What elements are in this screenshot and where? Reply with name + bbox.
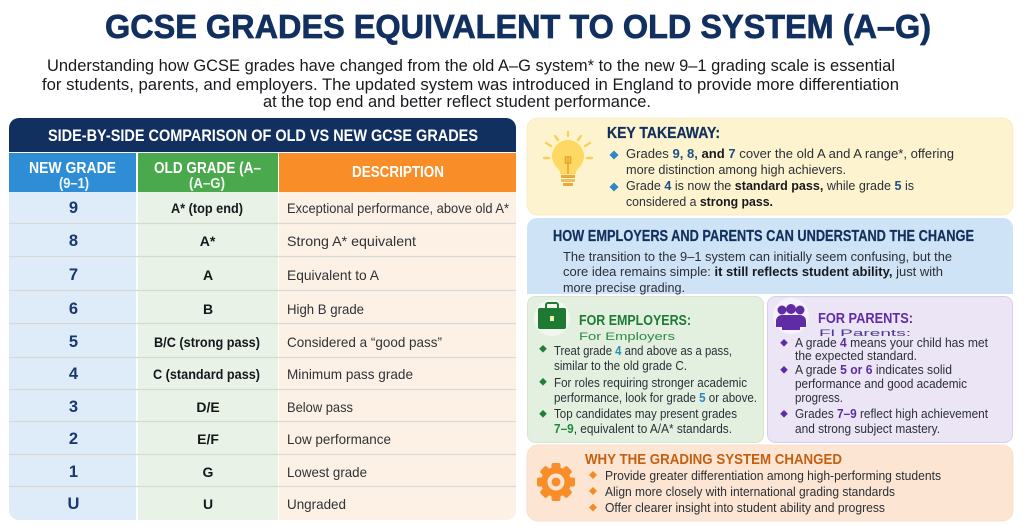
bullet list: employers: For roles requiring stronger academic bbox=[554, 375, 747, 390]
bullet list: parents: and strong subject mastery. bbox=[795, 421, 940, 436]
row 2: 2 bbox=[69, 430, 78, 448]
row U: U bbox=[203, 496, 213, 512]
column body: old grade bbox=[138, 192, 278, 520]
bullet list: key takeaway: considered a strong pass. bbox=[626, 194, 773, 209]
row 2: Low performance bbox=[287, 431, 391, 447]
row U: U bbox=[68, 495, 79, 513]
bullet list: key takeaway: more distinction among high achievers. bbox=[626, 162, 846, 177]
row 4 bbox=[69, 365, 413, 383]
title: GCSE GRADES EQUIVALENT TO OLD SYSTEM (A–G) bbox=[105, 8, 931, 45]
header text: old grade bbox=[154, 160, 261, 192]
row 9: 9 bbox=[69, 199, 78, 217]
bullet list: parents bbox=[780, 335, 988, 436]
row U bbox=[68, 495, 346, 513]
row 1: Lowest grade bbox=[287, 464, 367, 480]
bullet list: employers: 7–9, equivalent to A/A* standards. bbox=[554, 421, 732, 436]
row 2: E/F bbox=[197, 431, 219, 447]
panel: for employers bbox=[528, 296, 764, 442]
column header: old grade bbox=[138, 153, 278, 192]
icon: briefcase bbox=[534, 300, 570, 336]
bullet list: parents: performance and good academic bbox=[795, 376, 967, 391]
row 9: Exceptional performance, above old A* bbox=[287, 200, 510, 216]
header text: new grade bbox=[29, 160, 116, 192]
body text: understand the change: The transition to the 9–1 system can initially seem confusing, but the bbox=[563, 249, 952, 264]
bullet list: key takeaway: Grade 4 is now the standard pass, while grade 5 is bbox=[626, 178, 914, 193]
panel: key takeaway bbox=[527, 118, 1013, 215]
column body: description bbox=[279, 192, 516, 520]
row 7: 7 bbox=[69, 266, 78, 284]
row 3: 3 bbox=[69, 398, 78, 416]
subheading: for employers: For Employers bbox=[579, 331, 676, 343]
bullet list: employers: performance, look for grade 5 or above. bbox=[554, 390, 757, 405]
row 7: Equivalent to A bbox=[287, 267, 380, 283]
row 6: 6 bbox=[69, 300, 78, 318]
icon: light bulb bbox=[544, 132, 592, 186]
intro text bbox=[42, 57, 899, 111]
row 5: Considered a “good pass” bbox=[287, 334, 442, 350]
bullet list: key takeaway: Grades 9, 8, and 7 cover the old A and A range*, offering bbox=[626, 146, 954, 161]
row U: Ungraded bbox=[287, 496, 346, 512]
bullet list: employers: Top candidates may present grades bbox=[554, 406, 737, 421]
panel: for parents bbox=[768, 296, 1012, 442]
bullet list: key takeaway bbox=[610, 146, 954, 209]
row 8: A* bbox=[200, 233, 216, 249]
bullet list: reasons: Align more closely with international grading standards bbox=[605, 484, 895, 499]
subheading: for parents: Fl Parents: bbox=[819, 328, 911, 338]
panel: comparison table bbox=[9, 118, 516, 520]
bullet list: reasons: Provide greater differentiation among high-performing students bbox=[605, 468, 941, 483]
row 2 bbox=[69, 430, 391, 448]
row 5: B/C (strong pass) bbox=[154, 334, 260, 350]
heading: why the system changed: WHY THE GRADING SYSTEM CHANGED bbox=[585, 451, 842, 468]
row 8: Strong A* equivalent bbox=[287, 233, 416, 249]
bullet list: parents: A grade 5 or 6 indicates solid bbox=[795, 362, 952, 377]
bullet list: parents: the expected standard. bbox=[795, 348, 917, 363]
row 1: G bbox=[203, 464, 214, 480]
icon: people group bbox=[773, 298, 809, 334]
row 7 bbox=[69, 266, 380, 284]
row 4: Minimum pass grade bbox=[287, 366, 413, 382]
bullet list: employers: Treat grade 4 and above as a pass, bbox=[554, 343, 732, 358]
table title bar bbox=[9, 118, 516, 152]
row 3 bbox=[69, 398, 353, 416]
icon: gear bbox=[537, 463, 575, 501]
row 6: High B grade bbox=[287, 301, 364, 317]
heading: for employers: FOR EMPLOYERS: bbox=[579, 313, 691, 329]
panel: why the grading system changed bbox=[527, 445, 1013, 521]
row 8 bbox=[69, 232, 416, 250]
panel: how employers and parents can understand the change bbox=[527, 218, 1013, 295]
intro text: at the top end and better reflect student performance. bbox=[263, 93, 651, 111]
bullet list: employers bbox=[539, 343, 757, 436]
body text: understand the change: core idea remains simple: it still reflects student ability, just with bbox=[563, 264, 943, 279]
bullet list: employers: similar to the old grade C. bbox=[554, 358, 687, 373]
body text: understand the change: more precise grading. bbox=[563, 280, 685, 295]
intro text: Understanding how GCSE grades have changed from the old A–G system* to the new 9–1 grading scale is essential bbox=[47, 57, 895, 75]
row 5: 5 bbox=[69, 333, 78, 351]
row 7: A bbox=[203, 267, 213, 283]
header text: new grade: (9–1) bbox=[59, 175, 89, 192]
heading: key takeaway: KEY TAKEAWAY: bbox=[607, 125, 720, 142]
row 6 bbox=[69, 300, 364, 318]
intro text: for students, parents, and employers. The updated system was introduced in England to provide more differentiation bbox=[42, 76, 899, 94]
row 8: 8 bbox=[69, 232, 78, 250]
header text: old grade: (A–G) bbox=[189, 175, 225, 192]
bullet list: parents: A grade 4 means your child has met bbox=[795, 335, 988, 350]
row 3: Below pass bbox=[287, 399, 353, 415]
bullet list: reasons bbox=[589, 468, 941, 515]
row 3: D/E bbox=[196, 399, 220, 415]
row 4: C (standard pass) bbox=[153, 366, 260, 382]
column body: new grade bbox=[9, 192, 136, 520]
row 6: B bbox=[203, 301, 213, 317]
bullet list: parents: progress. bbox=[795, 390, 843, 405]
row 1 bbox=[69, 463, 367, 481]
column header: new grade bbox=[9, 153, 136, 192]
row 9 bbox=[69, 199, 510, 217]
body text: understand the change bbox=[563, 249, 952, 295]
row 5 bbox=[69, 333, 442, 351]
header text: new grade: NEW GRADE bbox=[29, 160, 116, 177]
bullet list: parents: Grades 7–9 reflect high achievement bbox=[795, 406, 988, 421]
heading: for parents: FOR PARENTS: bbox=[818, 311, 913, 327]
column header: description bbox=[279, 153, 516, 192]
row 4: 4 bbox=[69, 365, 79, 383]
header text: description: DESCRIPTION bbox=[352, 164, 444, 181]
table heading: SIDE-BY-SIDE COMPARISON OF OLD VS NEW GCSE GRADES bbox=[48, 127, 478, 145]
header text: old grade: OLD GRADE (A– bbox=[154, 160, 261, 177]
row 9: A* (top end) bbox=[171, 200, 243, 216]
row 1: 1 bbox=[69, 463, 78, 481]
bullet list: reasons: Offer clearer insight into student ability and progress bbox=[605, 500, 885, 515]
